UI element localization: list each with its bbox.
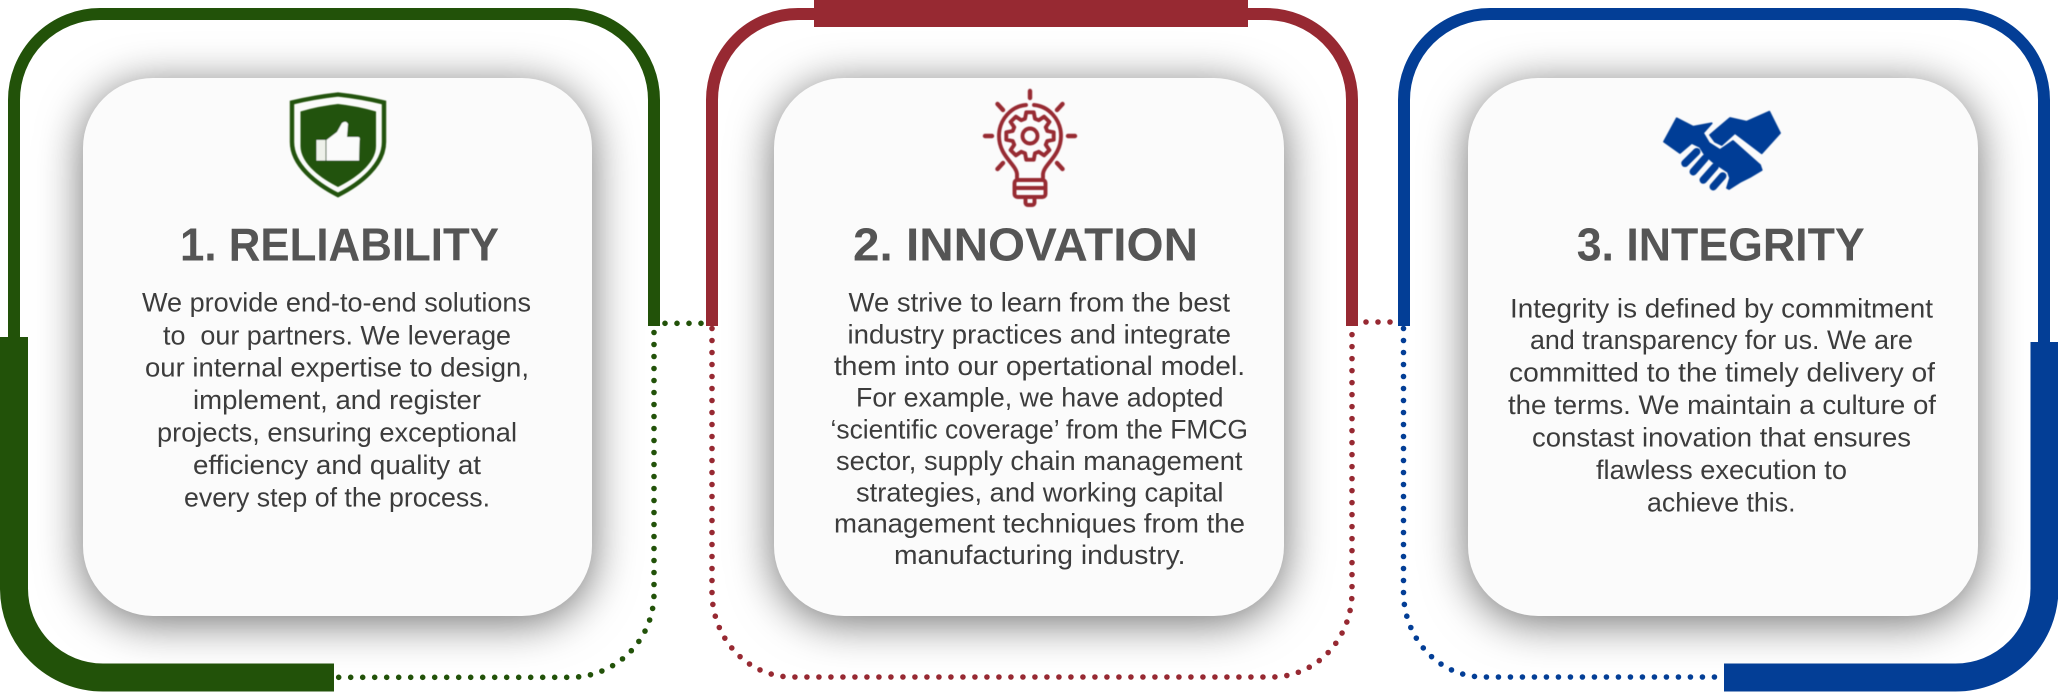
icon: handshake [1664,112,1780,189]
text: innovation description: strategies, and working capital [856,478,1224,508]
text: integrity description: and transparency for us. We are [1530,325,1913,355]
text: reliability description: our internal expertise to design, [145,353,529,383]
text: innovation description: management techniques from the [834,509,1245,539]
text: reliability description [142,288,531,513]
connector: red dots between panel 2 and 3 [1366,319,1392,325]
card: integrity [1468,78,1978,616]
panel: integrity [1404,14,2045,678]
heading: 1. RELIABILITY: 1. RELIABILITY [180,219,499,271]
text: innovation description: ‘scientific coverage’ from the FMCG [830,414,1248,444]
text: integrity description: committed to the timely delivery of [1509,358,1936,388]
ring: green thick corner [14,337,334,678]
icon: light bulb with gear [985,91,1075,205]
ring: blue solid outline [1404,14,2044,342]
card: reliability [83,78,592,616]
heading: 3. INTEGRITY: 3. INTEGRITY [1577,219,1865,271]
text: reliability description: projects, ensuring exceptional [157,418,517,448]
ring: red dotted section [712,328,1352,677]
text: reliability description: We provide end-to-end solutions [142,288,531,318]
ring: green dotted section [336,332,654,677]
text: integrity description: flawless execution to [1596,455,1847,485]
ring: blue thick corner [1724,342,2045,678]
panel: innovation [712,0,1352,677]
text: reliability description: every step of the process. [184,483,490,513]
text: innovation description [830,288,1248,570]
card: innovation [774,78,1284,616]
text: innovation description: sector, supply chain management [836,446,1243,476]
icon: shield with thumbs up [292,94,384,195]
panel: reliability [14,14,654,678]
ring: green solid outline [14,14,654,337]
heading: 2. INNOVATION: 2. INNOVATION [853,219,1198,271]
text: integrity description: achieve this. [1647,488,1796,518]
text: integrity description [1508,293,1937,518]
text: innovation description: manufacturing industry. [894,540,1186,570]
connector: green dots between panel 1 and 2 [665,320,702,326]
text: integrity description: constast inovation that ensures [1532,423,1911,453]
text: reliability description: efficiency and quality at [193,450,482,480]
ring: red thick top bar [814,0,1248,27]
text: integrity description: Integrity is defined by commitment [1510,293,1934,323]
text: reliability description: implement, and register [193,385,481,415]
text: innovation description: industry practices and integrate [848,319,1231,349]
text: innovation description: We strive to learn from the best [848,288,1231,318]
text: innovation description: them into our opertational model. [834,351,1245,381]
text: innovation description: For example, we have adopted [856,383,1224,413]
ring: red solid outline [712,14,1352,326]
text: reliability description: to our partners. We leverage [163,320,511,350]
ring: blue dotted section [1404,328,1722,677]
text: integrity description: the terms. We maintain a culture of [1508,390,1937,420]
